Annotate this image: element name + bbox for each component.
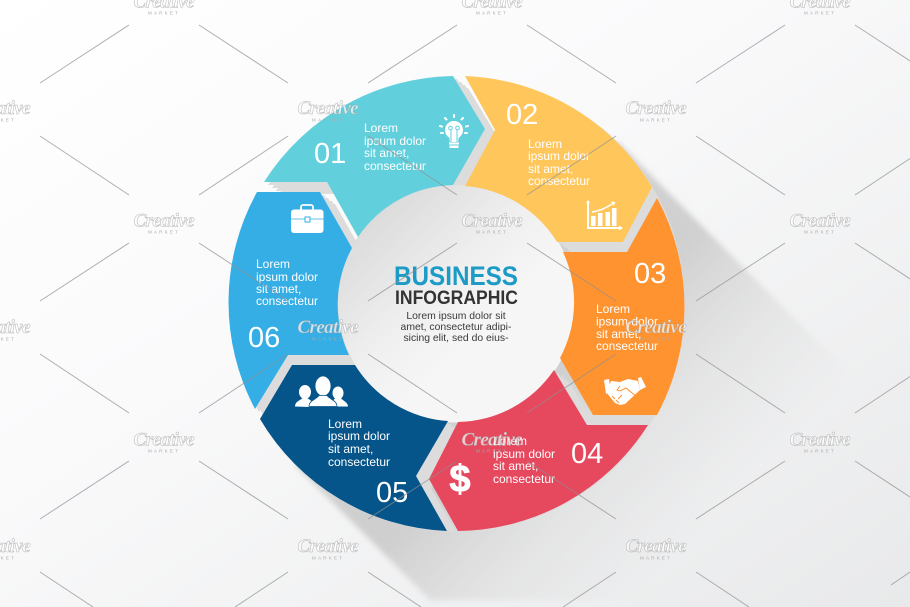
watermark logos: Creative bbox=[626, 317, 687, 338]
centre title block bbox=[394, 261, 518, 344]
text 05: Lorem bbox=[328, 417, 362, 431]
watermark logos: Creative bbox=[298, 317, 359, 338]
number 06: 06 bbox=[248, 322, 280, 354]
heading: business: BUSINESS bbox=[394, 261, 518, 291]
number 01: 01 bbox=[314, 138, 346, 170]
centre body text: amet, consectetur adipi- bbox=[401, 322, 511, 333]
text 04: consectetur bbox=[493, 472, 555, 486]
watermark logos: MARKET bbox=[640, 118, 672, 122]
number 04: 04 bbox=[571, 438, 603, 470]
segment 06 bbox=[229, 192, 352, 409]
text 02: ipsum dolor bbox=[528, 149, 590, 163]
text 03: ipsum dolor bbox=[596, 314, 658, 328]
icon: light bulb bbox=[440, 115, 468, 148]
number 03: 03 bbox=[634, 258, 666, 290]
watermark logos: MARKET bbox=[804, 448, 836, 454]
text 05: consectetur bbox=[328, 455, 390, 469]
icon: handshake bbox=[604, 377, 646, 405]
text 01: consectetur bbox=[364, 159, 426, 173]
text 05: ipsum dolor bbox=[328, 429, 390, 443]
text 02: consectetur bbox=[528, 174, 590, 188]
heading: infographic: INFOGRAPHIC bbox=[395, 288, 518, 309]
text 06: consectetur bbox=[256, 294, 318, 308]
segment 03 bbox=[560, 198, 684, 415]
icon: dollar: $ bbox=[449, 458, 471, 500]
watermark logos: MARKET bbox=[148, 10, 180, 16]
centre body text: Lorem ipsum dolor sit bbox=[406, 311, 506, 322]
watermark logos: MARKET bbox=[312, 336, 344, 342]
text 03: consectetur bbox=[596, 339, 658, 353]
text 04: Lorem bbox=[493, 434, 527, 448]
long shadow of ring bbox=[295, 142, 860, 600]
text 06: Lorem bbox=[256, 257, 290, 271]
centre body text: sicing elit, sed do eius- bbox=[403, 333, 509, 344]
text 01: ipsum dolor bbox=[364, 134, 426, 148]
watermark logos: Creative bbox=[298, 536, 359, 557]
watermark logos: MARKET bbox=[476, 448, 508, 454]
watermark logos: Creative bbox=[462, 430, 523, 450]
icon: bar chart bbox=[586, 200, 623, 230]
watermark logos: MARKET bbox=[312, 118, 344, 122]
icon: briefcase bbox=[291, 205, 324, 233]
watermark logos: MARKET bbox=[476, 10, 508, 16]
watermark logos: Creative bbox=[134, 430, 195, 450]
watermark logos: Creative bbox=[462, 210, 523, 232]
segment 02 bbox=[465, 76, 652, 242]
watermark logos: MARKET bbox=[476, 230, 508, 234]
text 06: sit amet, bbox=[256, 282, 301, 296]
text 05: sit amet, bbox=[328, 442, 373, 456]
number 05: 05 bbox=[376, 477, 408, 509]
text 03: sit amet, bbox=[596, 327, 641, 341]
watermark logos: MARKET bbox=[804, 230, 836, 234]
watermark logos: MARKET bbox=[148, 448, 180, 454]
watermark logos: Creative bbox=[790, 210, 851, 232]
watermark logos: Creative bbox=[134, 210, 195, 232]
icon: people bbox=[295, 376, 348, 407]
text 04: sit amet, bbox=[493, 459, 538, 473]
watermark logos: MARKET bbox=[312, 556, 344, 560]
text 04: ipsum dolor bbox=[493, 447, 555, 461]
watermark logos: MARKET bbox=[640, 336, 672, 342]
watermark logos: MARKET bbox=[640, 556, 672, 560]
watermark logos: Creative bbox=[626, 536, 687, 557]
watermark logos: Creative bbox=[790, 430, 851, 450]
text 01: Lorem bbox=[364, 121, 398, 135]
watermark logos: Creative bbox=[298, 98, 359, 119]
text 06: ipsum dolor bbox=[256, 270, 318, 284]
number 02: 02 bbox=[506, 99, 538, 131]
text 03: Lorem bbox=[596, 302, 630, 316]
text 01: sit amet, bbox=[364, 146, 409, 160]
text 02: Lorem bbox=[528, 137, 562, 151]
segment 04 bbox=[429, 370, 648, 531]
segment 01 bbox=[264, 76, 485, 237]
segment gap shadows bbox=[256, 79, 682, 530]
centre circle bbox=[338, 184, 576, 422]
text 02: sit amet, bbox=[528, 162, 573, 176]
watermark logos: MARKET bbox=[804, 10, 836, 16]
watermark logos: MARKET bbox=[148, 230, 180, 234]
watermark logos: Creative bbox=[626, 98, 687, 119]
segment 05 bbox=[260, 365, 448, 531]
